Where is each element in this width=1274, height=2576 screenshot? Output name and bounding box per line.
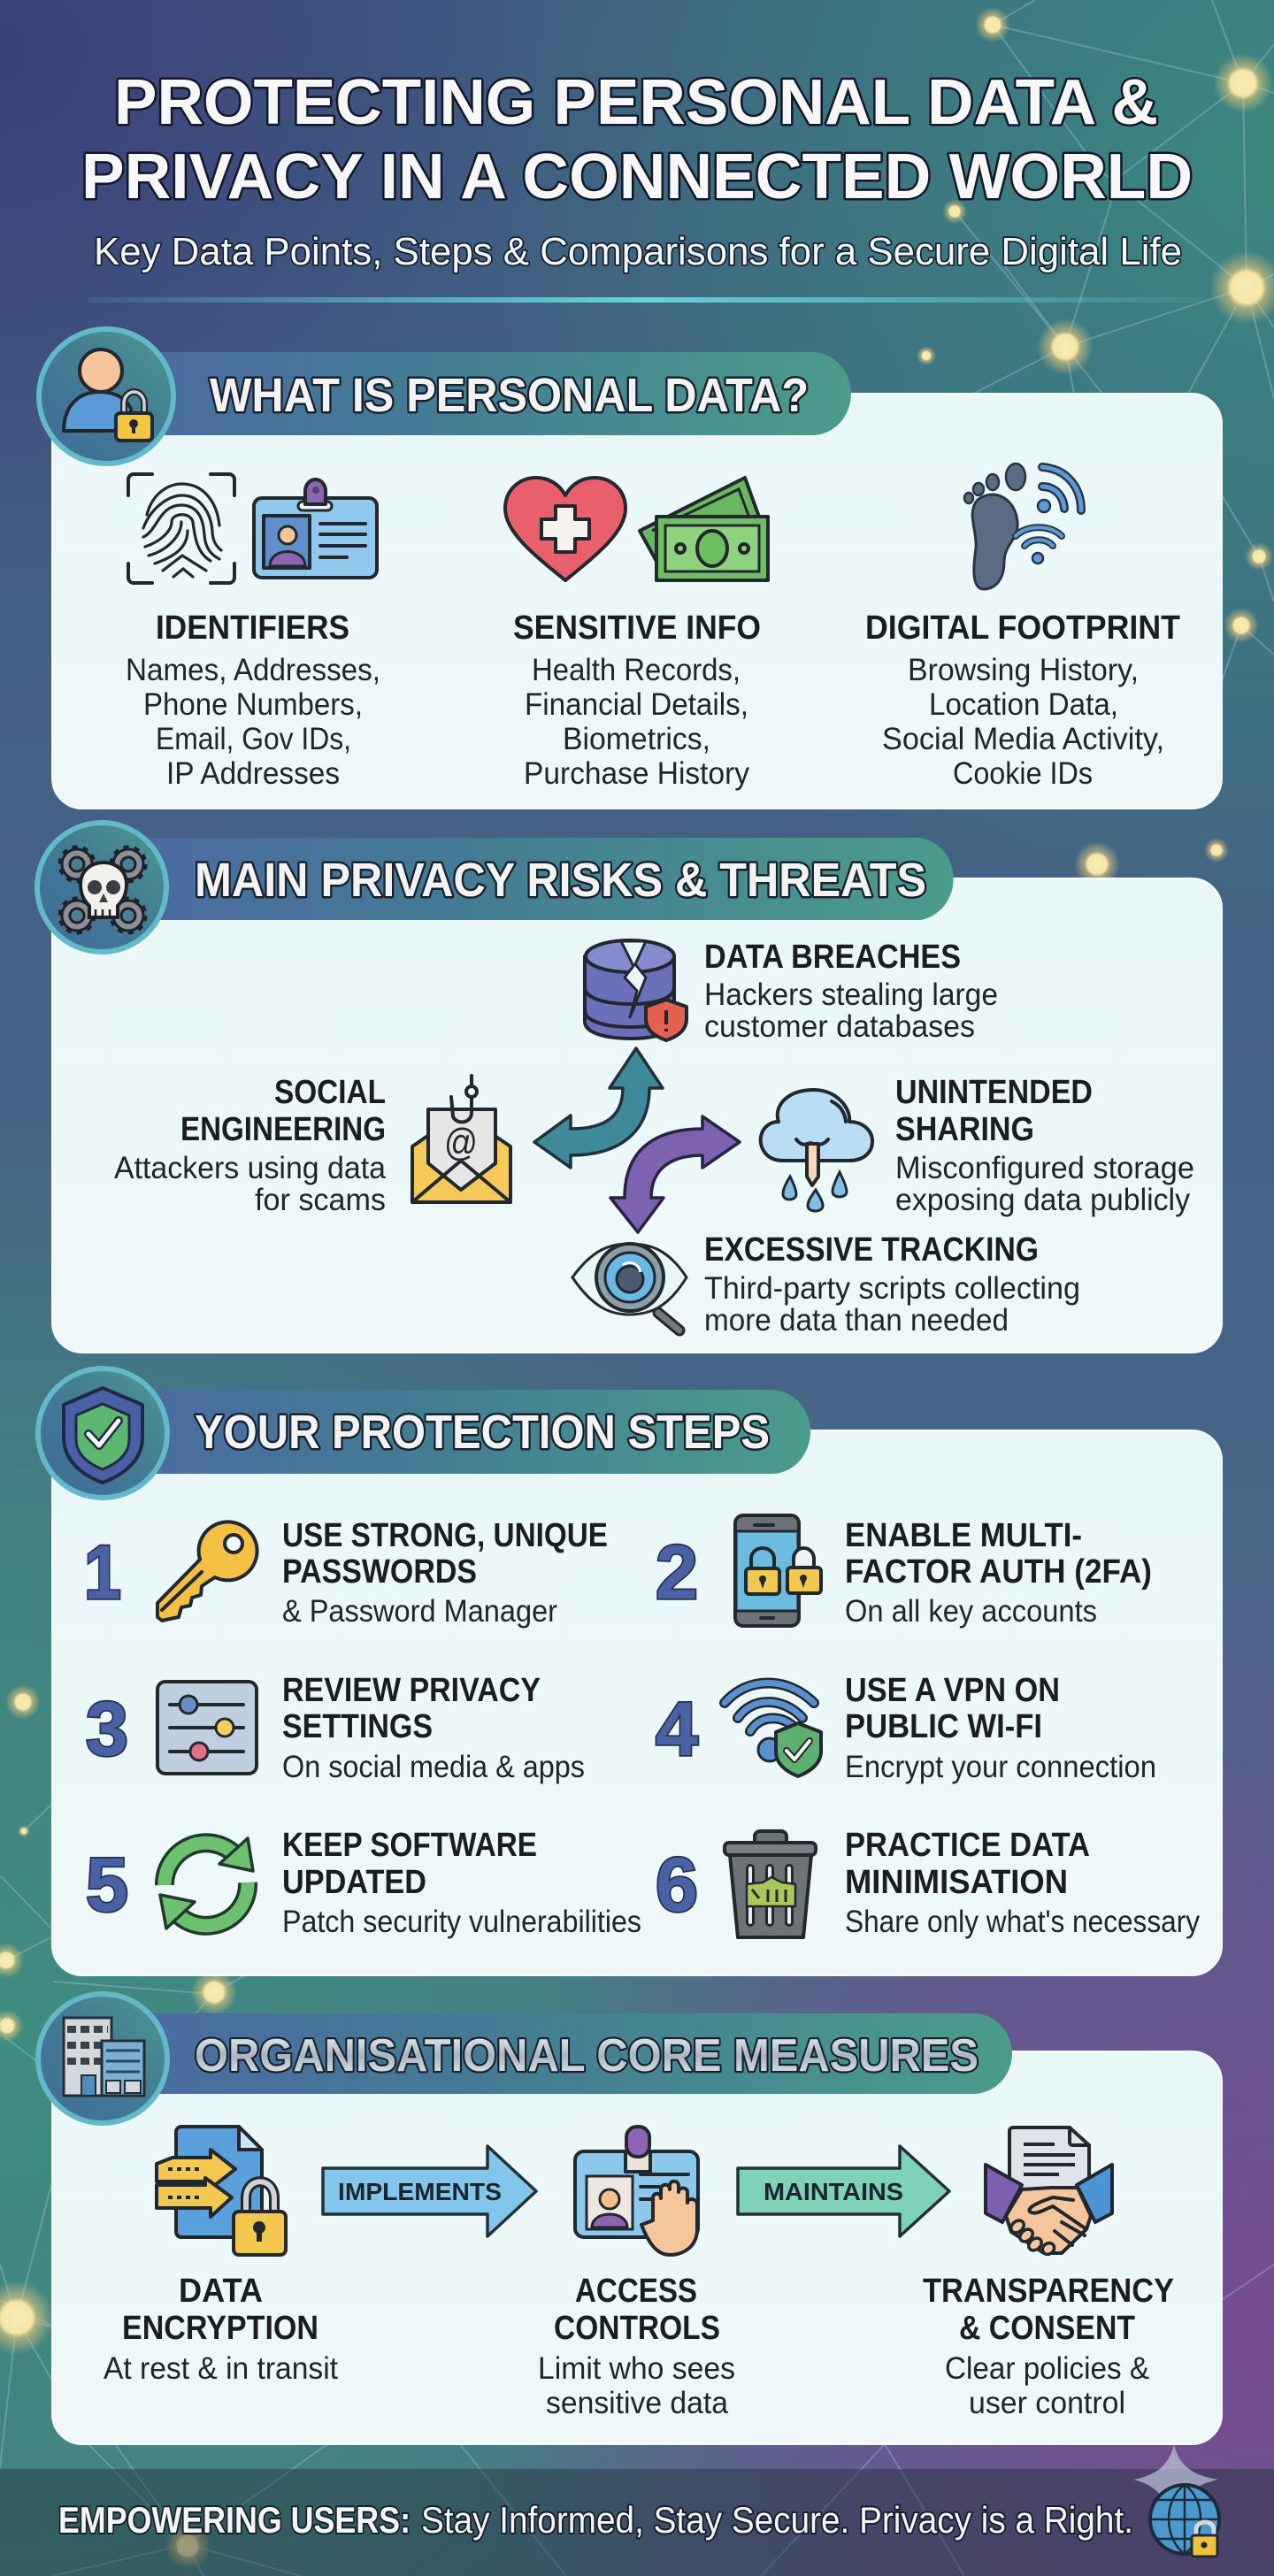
arrow: implements [323, 2146, 536, 2236]
arrow: maintains [738, 2146, 949, 2236]
step 5 text [282, 1827, 641, 1939]
step 2 text: ENABLE MULTI- [845, 1517, 1082, 1554]
arrow: implements: IMPLEMENTS [338, 2178, 502, 2205]
icon: id card [254, 479, 377, 578]
step 6 text [845, 1827, 1200, 1939]
step 3 text: On social media & apps [282, 1750, 585, 1784]
risk text: social engineering [114, 1074, 387, 1217]
icon: medical heart [505, 478, 625, 580]
risk text: data breaches [704, 939, 998, 1044]
footer message: Stay Informed, Stay Secure. Privacy is a Right. [421, 2499, 1133, 2541]
icon: office buildings [64, 2018, 144, 2096]
risk text: excessive tracking: Third-party scripts collecting [704, 1271, 1080, 1306]
heading bar: what is personal data: WHAT IS PERSONAL DATA? [210, 369, 809, 422]
panel: your protection steps [38, 1368, 1222, 1975]
step 4 text: Encrypt your connection [845, 1750, 1156, 1784]
risk text: unintended sharing: SHARING [895, 1111, 1034, 1148]
step 3 [86, 1672, 585, 1784]
step 4 text [845, 1672, 1156, 1784]
step 3 text: REVIEW PRIVACY [282, 1672, 541, 1709]
risk text: social engineering: Attackers using data [114, 1151, 387, 1185]
icon: encrypted file with lock [157, 2127, 286, 2255]
panel: what is personal data [39, 329, 1222, 809]
measure text: transparency and consent [923, 2273, 1174, 2420]
arrow: purple curved double arrow [610, 1116, 740, 1232]
heading bar: what is personal data [39, 329, 851, 464]
step 4 text: PUBLIC WI-FI [845, 1708, 1042, 1745]
title [81, 67, 1193, 212]
step 5 text: Patch security vulnerabilities [282, 1905, 641, 1939]
column text: sensitive info: Biometrics, [563, 722, 710, 756]
icon: access card with hand [575, 2127, 698, 2255]
step 5 [86, 1827, 641, 1939]
risk text: excessive tracking [704, 1231, 1080, 1338]
icon: shield with check [64, 1388, 142, 1483]
icon: eye with magnifier [572, 1244, 687, 1330]
risk text: social engineering: ENGINEERING [180, 1111, 386, 1148]
icon: skull and gears [60, 847, 145, 932]
column text: identifiers: Email, Gov IDs, [156, 722, 351, 756]
icon: settings sliders [157, 1682, 257, 1774]
number 4: 4 [656, 1687, 698, 1772]
step 4 [656, 1672, 1156, 1784]
measure text: access controls: sensitive data [546, 2386, 729, 2420]
heading bar: your protection steps [38, 1368, 810, 1498]
icon: fingerprint [128, 474, 234, 583]
measure text: data encryption: ENCRYPTION [122, 2310, 318, 2347]
measure text: transparency and consent: user control [969, 2386, 1125, 2420]
icon: banknotes [640, 478, 768, 580]
step 1 [84, 1517, 608, 1629]
arrow: teal curved double arrow [534, 1048, 663, 1168]
step 6 text: Share only what's necessary [845, 1905, 1200, 1939]
icon: person with lock [64, 349, 152, 441]
icon: cracked database [585, 940, 687, 1040]
step 5 text: UPDATED [282, 1864, 426, 1901]
title: PROTECTING PERSONAL DATA & [114, 67, 1158, 138]
icon: leaking cloud [761, 1090, 872, 1211]
icon: key [157, 1522, 257, 1621]
icon: globe with lock [1150, 2485, 1219, 2557]
measure text: access controls: CONTROLS [554, 2310, 720, 2347]
footer message [58, 2499, 1133, 2541]
heading bar: organisational core measures: ORGANISATIONAL CORE MEASURES [195, 2030, 979, 2082]
column text: identifiers: IP Addresses [166, 756, 340, 791]
risk text: unintended sharing: exposing data publicly [895, 1183, 1190, 1217]
column text: identifiers: IDENTIFIERS [156, 610, 349, 647]
risk text: social engineering: SOCIAL [274, 1074, 386, 1111]
icon: sparkle [1133, 2444, 1218, 2535]
step 6 text: MINIMISATION [845, 1864, 1068, 1901]
step 1 text: & Password Manager [282, 1594, 557, 1629]
column text: digital footprint: Cookie IDs [953, 756, 1093, 791]
heading bar: organisational core measures [38, 1994, 1012, 2123]
step 1 text: PASSWORDS [282, 1553, 477, 1591]
panel: main privacy risks and threats [37, 823, 1222, 1353]
column text: sensitive info: Purchase History [524, 756, 749, 791]
step 2 text [845, 1517, 1152, 1629]
measure text: data encryption: At rest & in transit [104, 2351, 338, 2386]
number 2: 2 [656, 1530, 698, 1615]
risk text: excessive tracking: EXCESSIVE TRACKING [704, 1231, 1039, 1269]
measure text: access controls: Limit who sees [538, 2351, 735, 2386]
step 1 text [282, 1517, 608, 1629]
icon: phishing envelope: @ [444, 1121, 478, 1164]
footer band [0, 2444, 1274, 2576]
risk text: data breaches: DATA BREACHES [704, 939, 961, 976]
column text: identifiers: Phone Numbers, [143, 687, 363, 722]
icon: trash bin [725, 1831, 816, 1937]
column text: sensitive info: SENSITIVE INFO [513, 610, 761, 647]
icon: update arrows [160, 1838, 253, 1928]
column text: digital footprint: Location Data, [929, 687, 1118, 722]
step 2 [656, 1515, 1152, 1629]
column text: sensitive info: Financial Details, [525, 687, 748, 722]
column text: digital footprint: Browsing History, [908, 653, 1139, 687]
measure text: data encryption: DATA [179, 2273, 263, 2310]
panel: organisational core measures [38, 1994, 1222, 2444]
heading bar: your protection steps: YOUR PROTECTION STEPS [195, 1406, 770, 1459]
step 2 text: FACTOR AUTH (2FA) [845, 1553, 1152, 1591]
column text: sensitive info: Health Records, [532, 653, 741, 687]
icon: digital footprint [964, 464, 1081, 589]
step 3 text: SETTINGS [282, 1708, 433, 1745]
number 3: 3 [86, 1687, 128, 1772]
risk text: unintended sharing: UNINTENDED [895, 1074, 1093, 1111]
measure text: transparency and consent: Clear policies & [945, 2351, 1149, 2386]
risk text: unintended sharing: Misconfigured storage [895, 1151, 1194, 1185]
column text: identifiers: Names, Addresses, [126, 653, 380, 687]
number 1: 1 [84, 1530, 121, 1615]
risk text: unintended sharing [895, 1074, 1194, 1217]
measure text: data encryption [104, 2273, 338, 2386]
risk text: data breaches: customer databases [704, 1009, 975, 1044]
icon: phishing envelope [412, 1076, 510, 1202]
number 5: 5 [86, 1843, 128, 1928]
step 4 text: USE A VPN ON [845, 1672, 1060, 1709]
number 6: 6 [656, 1843, 698, 1928]
step 3 text [282, 1672, 585, 1784]
column text: sensitive info [513, 610, 761, 791]
step 1 text: USE STRONG, UNIQUE [282, 1517, 608, 1554]
measure text: access controls [538, 2273, 735, 2420]
column text: identifiers [126, 610, 380, 791]
step 2 text: On all key accounts [845, 1594, 1097, 1629]
icon: phone with locks [735, 1515, 821, 1626]
column text: digital footprint: DIGITAL FOOTPRINT [865, 610, 1180, 647]
risk text: social engineering: for scams [255, 1183, 386, 1217]
title divider [88, 297, 1203, 303]
icon: wifi with shield [725, 1683, 821, 1776]
step 6 [656, 1827, 1200, 1939]
subtitle: Key Data Points, Steps & Comparisons for a Secure Digital Life [94, 230, 1182, 273]
risk text: excessive tracking: more data than needed [704, 1303, 1009, 1338]
measure text: transparency and consent: TRANSPARENCY [923, 2273, 1174, 2310]
icon: document and handshake [986, 2128, 1112, 2257]
footer message: EMPOWERING USERS: [58, 2499, 411, 2541]
measure text: transparency and consent: & CONSENT [959, 2310, 1135, 2347]
risk text: data breaches: Hackers stealing large [704, 978, 998, 1012]
measure text: access controls: ACCESS [575, 2273, 697, 2310]
title: PRIVACY IN A CONNECTED WORLD [81, 142, 1193, 212]
step 5 text: KEEP SOFTWARE [282, 1827, 537, 1864]
column text: digital footprint [865, 610, 1180, 791]
step 6 text: PRACTICE DATA [845, 1827, 1090, 1864]
heading bar: main privacy risks: MAIN PRIVACY RISKS & THREATS [195, 854, 926, 907]
heading bar: main privacy risks [37, 823, 954, 952]
column text: digital footprint: Social Media Activity, [882, 722, 1164, 756]
arrow: maintains: MAINTAINS [764, 2178, 903, 2205]
